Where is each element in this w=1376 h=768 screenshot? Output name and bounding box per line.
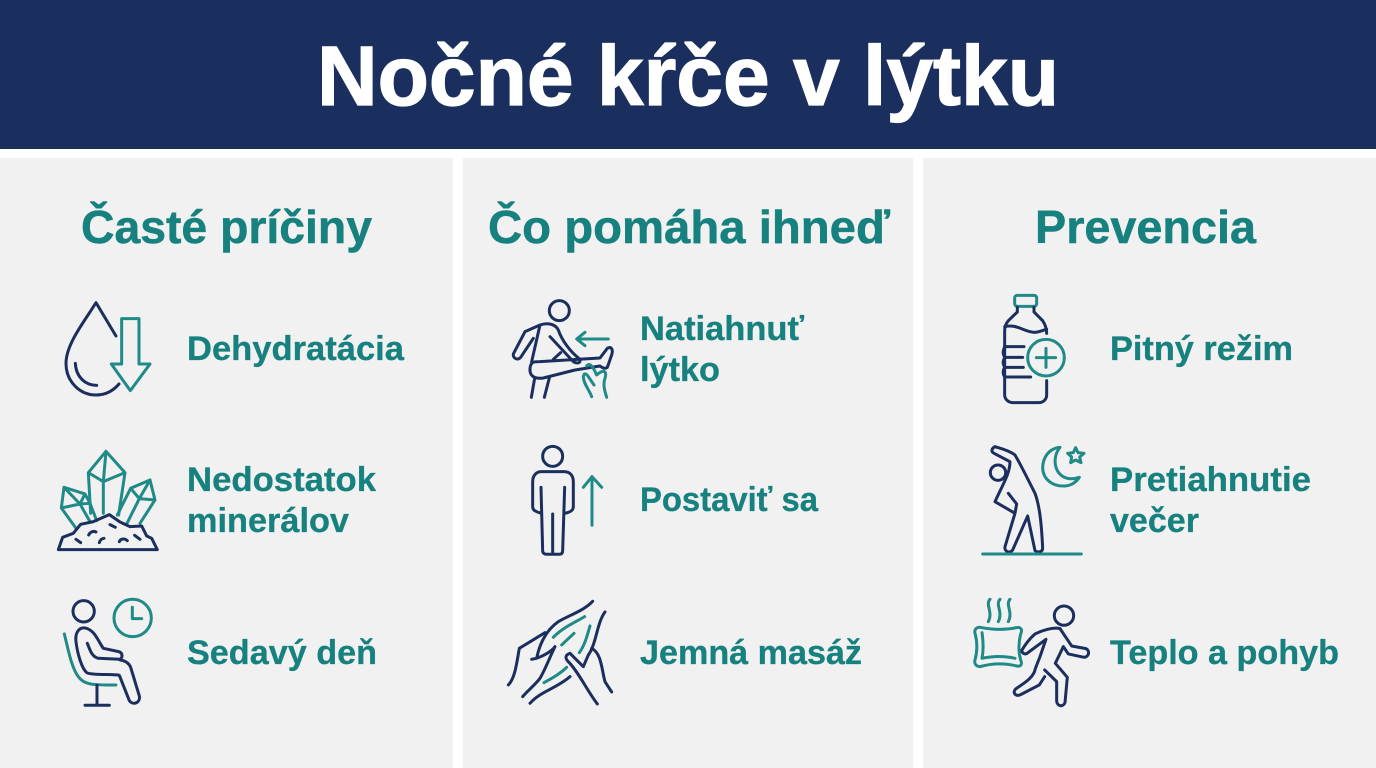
panel: causes xyxy=(0,158,453,768)
title banner xyxy=(0,0,1376,149)
label: stretch calf: Natiahnuť xyxy=(640,310,805,348)
panel: immediate help xyxy=(463,158,913,768)
label: heat and movement: Teplo a pohyb xyxy=(1110,634,1339,672)
heading: immediate help: Čo pomáha ihneď xyxy=(488,201,891,253)
icon: warm pillow and walking person xyxy=(975,599,1089,706)
title: Nočné kŕče v lýtku xyxy=(317,29,1059,123)
icon: sitting person with clock xyxy=(64,599,151,705)
label: stand up: Postaviť sa xyxy=(640,481,819,519)
panel: prevention xyxy=(923,158,1376,768)
label: sedentary day: Sedavý deň xyxy=(187,634,377,672)
label: dehydration: Dehydratácia xyxy=(187,330,405,368)
icon: mineral crystals xyxy=(58,451,157,550)
panel: causes: minerálov xyxy=(187,502,349,540)
heading: causes: Časté príčiny xyxy=(81,201,372,253)
icon: calf stretch xyxy=(513,301,612,397)
panel: immediate help: lýtko xyxy=(640,351,720,389)
icon: standing person with up arrow xyxy=(533,446,602,554)
label: mineral deficiency: Nedostatok xyxy=(187,461,376,499)
icon: evening stretch xyxy=(983,447,1084,554)
heading: prevention: Prevencia xyxy=(1035,201,1256,253)
label: gentle massage: Jemná masáž xyxy=(640,634,862,672)
label: hydration: Pitný režim xyxy=(1110,330,1293,368)
icon: water bottle with plus xyxy=(1003,295,1064,403)
panel: prevention: večer xyxy=(1110,502,1199,540)
icon: massage hands xyxy=(508,601,612,704)
icon: water drop with down arrow xyxy=(66,303,150,395)
label: evening stretch: Pretiahnutie xyxy=(1110,461,1311,499)
